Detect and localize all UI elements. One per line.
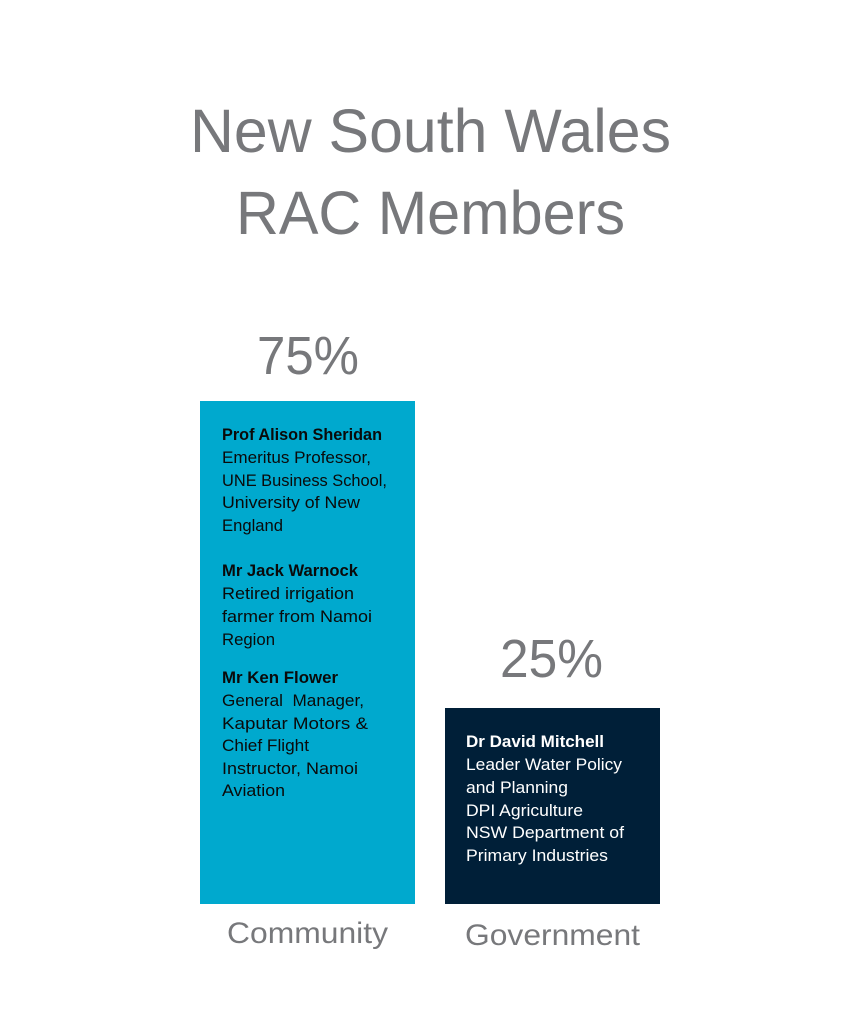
member: Dr David Mitchell: DPI Agriculture: [466, 802, 583, 820]
member: Mr Jack Warnock: [222, 562, 372, 649]
member: Mr Ken Flower: Chief Flight: [222, 737, 309, 755]
member: Prof Alison Sheridan: Emeritus Professor,: [222, 449, 371, 467]
member: Prof Alison Sheridan: [222, 426, 387, 535]
label: Government: Government: [465, 919, 641, 952]
member: Mr Ken Flower: Aviation: [222, 782, 285, 800]
member: Mr Jack Warnock: Mr Jack Warnock: [222, 562, 359, 580]
member: Dr David Mitchell: [466, 733, 624, 865]
member: Prof Alison Sheridan: Prof Alison Sheridan: [222, 426, 382, 444]
member: Prof Alison Sheridan: University of New: [222, 494, 360, 512]
member: Mr Ken Flower: Kaputar Motors &: [222, 715, 368, 733]
bar: community: [200, 401, 415, 904]
member: Mr Jack Warnock: Retired irrigation: [222, 585, 354, 603]
member: Mr Ken Flower: General Manager,: [222, 692, 364, 710]
member: Dr David Mitchell: Primary Industries: [466, 847, 608, 865]
title: RAC Members: [236, 179, 625, 247]
member: Mr Ken Flower: Instructor, Namoi: [222, 760, 358, 778]
bar: government: [445, 708, 660, 904]
member: Dr David Mitchell: Leader Water Policy: [466, 756, 623, 774]
title: New South Wales: [190, 97, 671, 165]
member: Mr Jack Warnock: Region: [222, 631, 275, 649]
member: Dr David Mitchell: NSW Department of: [466, 824, 624, 842]
member: Dr David Mitchell: and Planning: [466, 779, 568, 797]
member: Prof Alison Sheridan: UNE Business School,: [222, 472, 387, 490]
member: Mr Jack Warnock: farmer from Namoi: [222, 608, 372, 626]
value: community 75%: 75%: [257, 326, 359, 386]
title: [190, 97, 671, 247]
member: Prof Alison Sheridan: England: [222, 517, 283, 535]
member: Mr Ken Flower: [222, 669, 368, 800]
label: Community: Community: [227, 917, 388, 950]
member: Mr Ken Flower: Mr Ken Flower: [222, 669, 339, 687]
member: Dr David Mitchell: Dr David Mitchell: [466, 733, 604, 751]
value: government 25%: 25%: [500, 629, 603, 689]
